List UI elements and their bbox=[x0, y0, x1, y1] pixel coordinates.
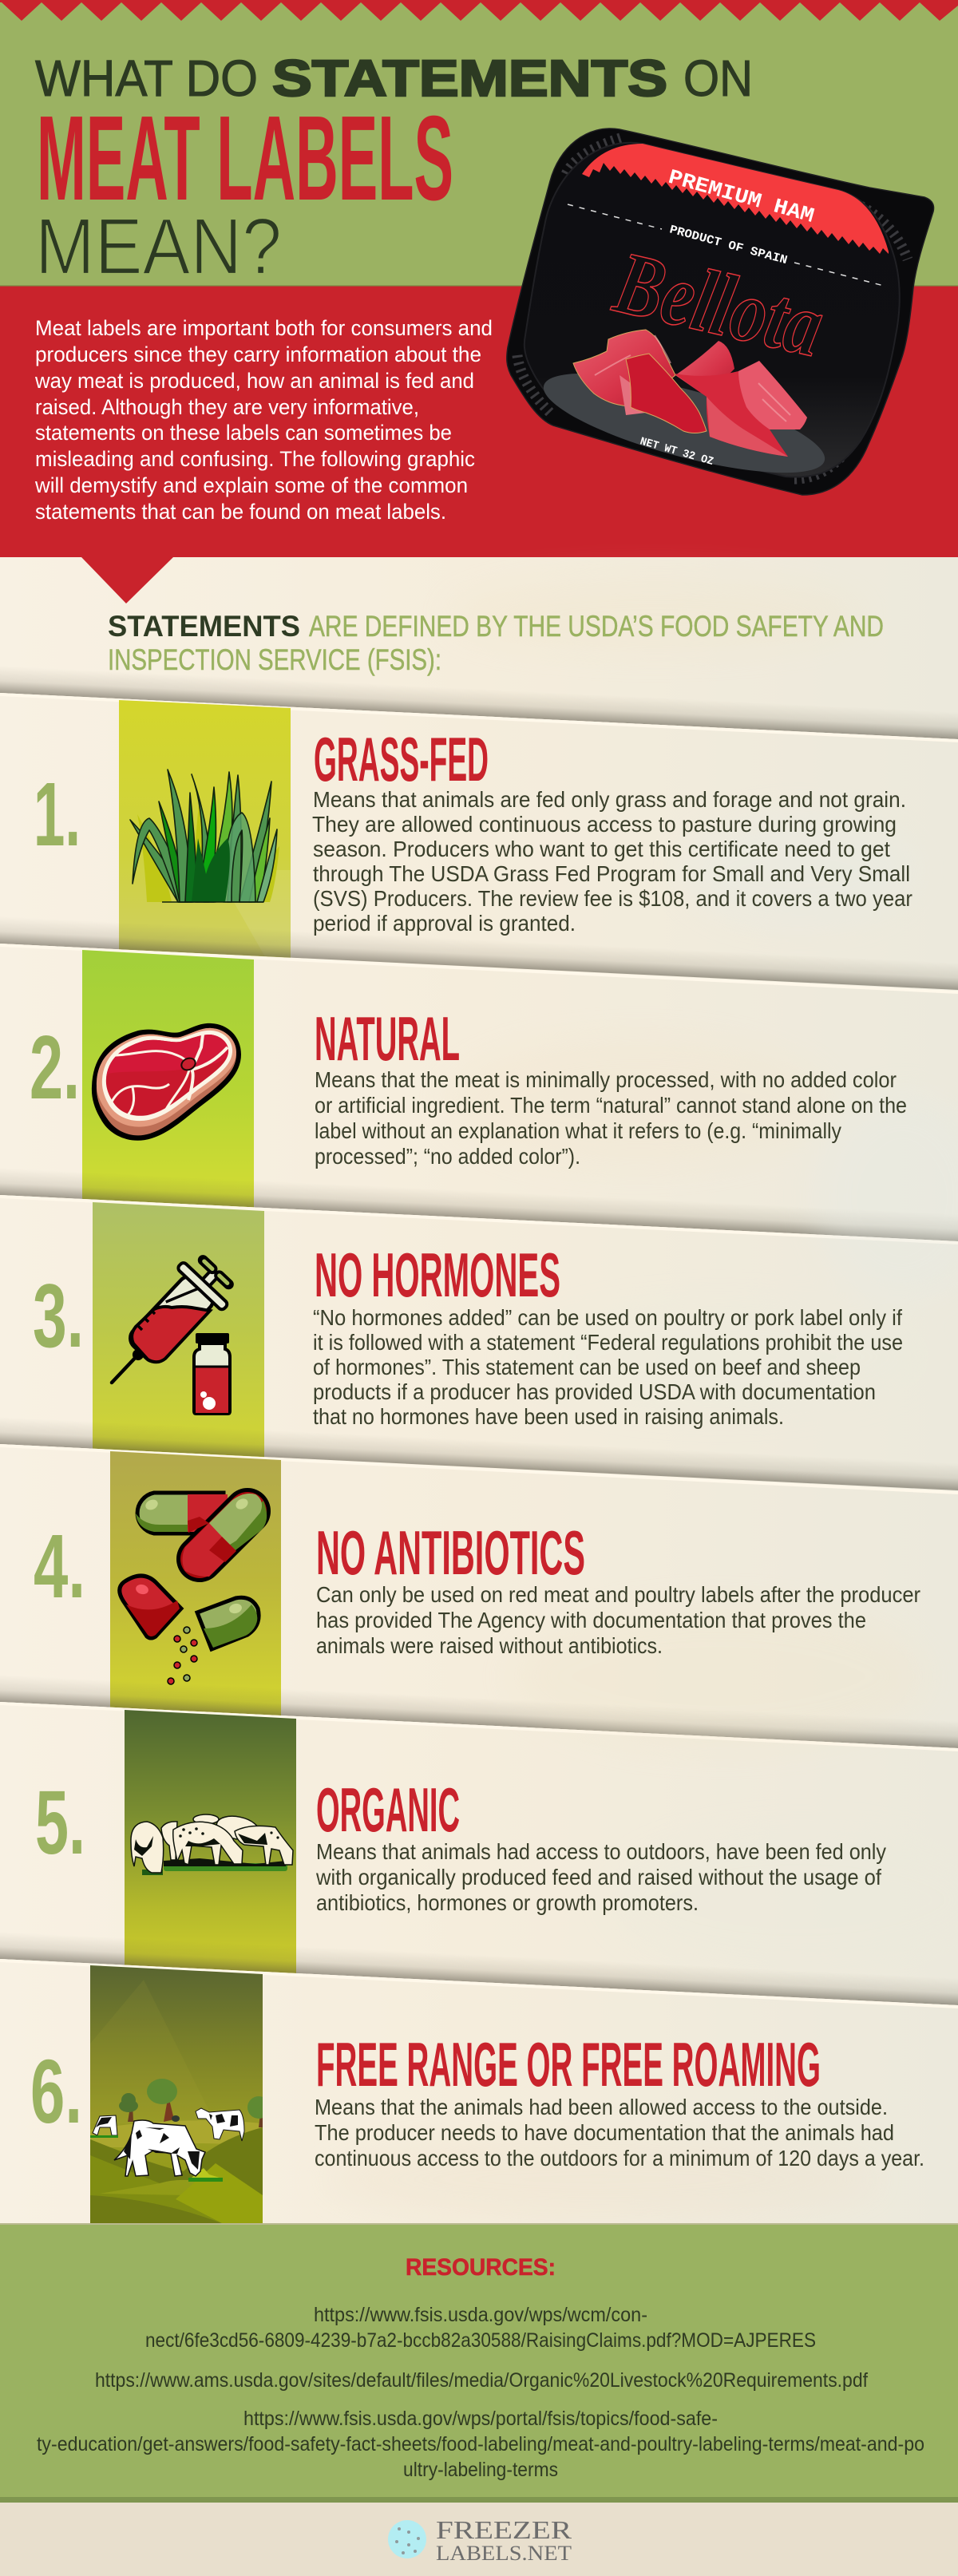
icon: grazing cows and trees bbox=[90, 2079, 270, 2182]
icon: grazing sheep bbox=[131, 1813, 293, 1875]
cow right bbox=[196, 2108, 244, 2141]
text: ORGANIC bbox=[316, 1775, 460, 1845]
logo snowflake icon bbox=[388, 2520, 426, 2558]
shadow above panel 3 bbox=[0, 1168, 958, 1244]
title: STATEMENTS bbox=[272, 49, 667, 107]
heading: no hormones: NO HORMONES bbox=[315, 1240, 560, 1310]
number 5: 5. bbox=[35, 1772, 85, 1873]
text block: no antibiotics: animals were raised without antibiotics. bbox=[316, 1633, 663, 1658]
text: GRASS-FED bbox=[314, 724, 489, 794]
centre sheep bbox=[173, 1822, 243, 1865]
panel 6 colour strip with landscape bbox=[90, 1965, 263, 2224]
shadow above panel 4 bbox=[0, 1417, 958, 1494]
panel 1 colour strip bbox=[119, 700, 291, 1038]
panel 4 colour strip bbox=[110, 1451, 281, 1796]
intro text: statements on these labels can sometimes be bbox=[35, 421, 452, 445]
panel 2 colour strip bbox=[82, 950, 254, 1277]
label text: bellota: Bellota bbox=[605, 232, 833, 376]
text block: grass-fed: through The USDA Grass Fed Program for Small and Very Small bbox=[313, 861, 910, 886]
intro text: raised. Although they are very informative, bbox=[35, 395, 419, 419]
text block: grass-fed: Means that animals are fed only grass and forage and not grain. bbox=[313, 787, 906, 812]
intro text bbox=[34, 316, 493, 524]
text block: no hormones: products if a producer has provided USDA with documentation bbox=[313, 1379, 876, 1404]
slate plate bbox=[535, 353, 833, 493]
main cow bbox=[114, 2120, 205, 2176]
logo wordmark: FREEZER bbox=[436, 2515, 572, 2544]
panel 4 background bbox=[0, 1444, 958, 2224]
red label band bbox=[582, 144, 889, 254]
text block: no hormones: that no hormones have been used in raising animals. bbox=[313, 1404, 784, 1429]
resources links: https://www.fsis.usda.gov/wps/portal/fsis/topics/food-safe- bbox=[243, 2408, 718, 2430]
intro text: producers since they carry information about the bbox=[35, 342, 481, 366]
text block: free range bbox=[315, 2095, 924, 2170]
intro text: misleading and confusing. The following graphic bbox=[35, 447, 475, 471]
number 1: 1. bbox=[34, 764, 81, 865]
text block: grass-fed bbox=[312, 787, 912, 936]
left sheep bbox=[131, 1822, 164, 1873]
icon: pills bbox=[120, 1493, 267, 1684]
resources links: nect/6fe3cd56-6809-4239-b7a2-bccb82a30588/RaisingClaims.pdf?MOD=AJPERES bbox=[145, 2329, 816, 2352]
label text: net weight: NET WT 32 OZ bbox=[639, 435, 715, 469]
intro text: will demystify and explain some of the common bbox=[34, 473, 468, 497]
number 2: 2. bbox=[30, 1017, 80, 1118]
subheading: statements defined by USDA FSIS bbox=[108, 610, 884, 676]
panel 2 background bbox=[0, 944, 958, 2224]
icon: syringe and vial bbox=[89, 1251, 239, 1414]
zigzag top border bbox=[0, 0, 958, 21]
text block: no hormones: of hormones”. This statement can be used on beef and sheep bbox=[313, 1355, 861, 1379]
text block: natural bbox=[315, 1067, 907, 1169]
text block: grass-fed: (SVS) Producers. The review fee is $108, and it covers a two year bbox=[313, 886, 912, 911]
small cow left bbox=[93, 2115, 117, 2135]
text block: no hormones: it is followed with a statement “Federal regulations prohibit the use bbox=[313, 1330, 903, 1355]
text block: free range: The producer needs to have documentation that the animals had bbox=[315, 2120, 894, 2145]
number 3: 3. bbox=[33, 1265, 84, 1366]
label text: product of spain: PRODUCT OF SPAIN bbox=[668, 223, 789, 267]
logo wordmark: LABELS.NET bbox=[436, 2542, 572, 2565]
text block: grass-fed: period if approval is granted. bbox=[313, 911, 576, 936]
text block: organic: with organically produced feed and raised without the usage of bbox=[315, 1865, 881, 1889]
ham package illustration bbox=[507, 129, 934, 495]
ham slices bbox=[675, 341, 734, 397]
intro text: Meat labels are important both for consumers and bbox=[35, 316, 493, 340]
text block: grass-fed: season. Producers who want to get this certificate need to get bbox=[313, 837, 890, 861]
header green background bbox=[0, 0, 958, 287]
intro red panel bbox=[0, 285, 958, 603]
paper background and statement panels bbox=[0, 557, 958, 2224]
title: ON bbox=[683, 49, 753, 107]
resources links: ultry-labeling-terms bbox=[403, 2459, 558, 2481]
text block: natural: Means that the meat is minimally processed, with no added color bbox=[315, 1067, 897, 1092]
subheading: statements defined by USDA FSIS: INSPECTION SERVICE (FSIS): bbox=[108, 643, 441, 676]
text block: organic bbox=[315, 1839, 886, 1915]
right sheep bbox=[235, 1826, 293, 1865]
intro text: statements that can be found on meat labels. bbox=[35, 500, 446, 524]
text block: no hormones bbox=[313, 1305, 903, 1429]
grass patch bbox=[188, 2178, 223, 2182]
subheading: statements defined by USDA FSIS: STATEMENTS bbox=[108, 610, 300, 643]
shadow above panel 5 bbox=[0, 1675, 958, 1751]
panel 6 background bbox=[0, 1959, 958, 2224]
logo wordmark bbox=[436, 2515, 572, 2565]
title: WHAT DO bbox=[35, 49, 258, 107]
heading: no antibiotics: NO ANTIBIOTICS bbox=[316, 1518, 585, 1588]
text block: organic: antibiotics, hormones or growth promoters. bbox=[316, 1890, 699, 1915]
footer bbox=[0, 2503, 958, 2576]
title: MEAN? bbox=[35, 202, 282, 291]
panel 5 colour strip bbox=[125, 1710, 296, 2044]
panel: resources bbox=[0, 2223, 958, 2503]
title: MEAT LABELS bbox=[37, 90, 453, 225]
text block: organic: Means that animals had access to outdoors, have been fed only bbox=[316, 1839, 886, 1864]
shadow above panel 6 bbox=[0, 1932, 958, 2008]
text block: natural: label without an explanation what it refers to (e.g. “minimally bbox=[315, 1118, 841, 1143]
resources links: https://www.ams.usda.gov/sites/default/files/media/Organic%20Livestock%20Requirements.pdf bbox=[95, 2369, 868, 2392]
vial bbox=[194, 1343, 230, 1414]
paper texture blotches bbox=[319, 579, 958, 2219]
icon: grass bbox=[130, 770, 279, 902]
label text: premium ham: PREMIUM HAM bbox=[666, 165, 817, 228]
text: NATURAL bbox=[315, 1003, 460, 1074]
resources heading: RESOURCES: bbox=[406, 2254, 556, 2281]
text block: grass-fed: They are allowed continuous access to pasture during growing bbox=[312, 812, 897, 837]
number 4: 4. bbox=[34, 1516, 85, 1616]
text block: no antibiotics: has provided The Agency with documentation that proves the bbox=[316, 1608, 866, 1632]
icon: raw steak bbox=[92, 1023, 241, 1141]
panel 5 background bbox=[0, 1702, 958, 2224]
text block: no antibiotics bbox=[316, 1582, 920, 1658]
resources links: https://www.fsis.usda.gov/wps/wcm/con- bbox=[314, 2304, 647, 2326]
shadow above panel 1 bbox=[0, 666, 958, 742]
panel 1 background bbox=[0, 693, 958, 2224]
shadow above panel 2 bbox=[0, 916, 958, 993]
panel 3 background bbox=[0, 1195, 958, 2224]
text block: natural: or artificial ingredient. The term “natural” cannot stand alone on the bbox=[315, 1093, 907, 1118]
back sheep bbox=[193, 1814, 219, 1824]
title bbox=[35, 49, 753, 291]
text block: natural: processed”; “no added color”). bbox=[315, 1144, 580, 1169]
text block: no hormones: “No hormones added” can be used on poultry or pork label only if bbox=[313, 1305, 902, 1330]
panel 3 colour strip bbox=[93, 1202, 264, 1517]
intro text: way meat is produced, how an animal is fed and bbox=[34, 369, 474, 393]
number 6: 6. bbox=[30, 2041, 82, 2142]
resources links bbox=[37, 2304, 924, 2481]
text block: free range: Means that the animals had been allowed access to the outside. bbox=[315, 2095, 888, 2119]
